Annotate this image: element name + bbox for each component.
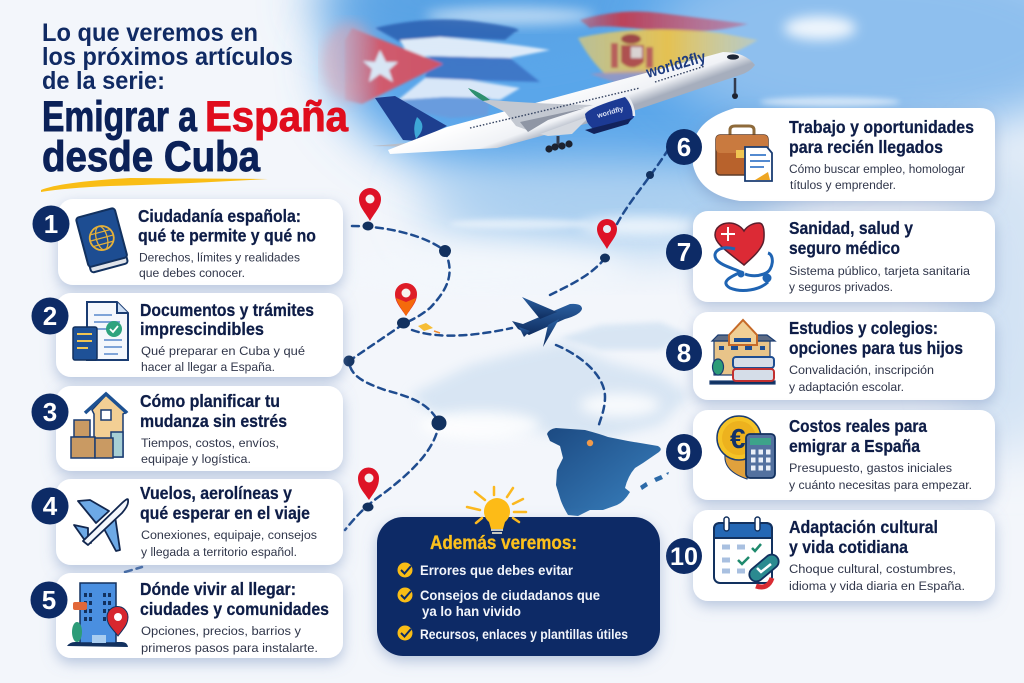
map of Spain <box>547 428 669 516</box>
large airliner <box>372 49 755 154</box>
callout: además veremos: Consejos de ciudadanos que <box>420 588 600 604</box>
card 8: Estudios y colegios: <box>789 318 938 338</box>
title: de la serie: <box>42 67 165 95</box>
card 2: imprescindibles <box>140 319 264 339</box>
card 3: equipaje y logística. <box>141 452 251 466</box>
card 1: que debes conocer. <box>139 266 245 280</box>
map pin 3 orange <box>395 283 417 316</box>
icon: euro coin and calculator: € <box>730 423 746 454</box>
badge 4 <box>32 488 68 524</box>
badge 7: 7 <box>677 237 691 267</box>
title: Lo que veremos en <box>42 19 258 47</box>
card 2: hacer al llegar a España. <box>141 360 275 374</box>
card 1: qué te permite y qué no <box>138 226 316 246</box>
title: Emigrar a <box>42 93 198 141</box>
card 4: y llegada a territorio español. <box>141 545 297 559</box>
icon: building with pin <box>67 583 128 647</box>
card 9 <box>666 410 995 500</box>
card 5 <box>30 573 343 658</box>
card 1 <box>32 199 343 285</box>
badge 7 <box>666 234 702 270</box>
small Caribbean islands <box>418 323 440 333</box>
card 2: Qué preparar en Cuba y qué <box>141 344 305 358</box>
card 6: Cómo buscar empleo, homologar <box>789 162 965 176</box>
card 4: Conexiones, equipaje, consejos <box>141 528 317 542</box>
card 8: opciones para tus hijos <box>789 338 963 358</box>
map pin 4 <box>358 468 379 500</box>
card 9: y cuánto necesitas para empezar. <box>789 478 972 492</box>
large airliner: worldfly <box>596 106 624 120</box>
icon: airplane <box>74 499 128 551</box>
airline logo: world2fly <box>644 49 708 82</box>
card 8 <box>666 312 995 400</box>
map pin 2 <box>597 219 617 249</box>
badge 8: 8 <box>677 338 691 368</box>
route stop dots <box>344 171 654 512</box>
card 9: emigrar a España <box>789 436 920 456</box>
card 6 <box>666 108 995 201</box>
badge 5 <box>30 582 68 618</box>
badge 3 <box>32 394 68 430</box>
icon: school and books <box>710 320 775 384</box>
callout: además veremos <box>377 517 660 656</box>
card 7: y seguros privados. <box>789 280 893 294</box>
icon: passport <box>76 208 129 273</box>
badge 8 <box>666 335 702 371</box>
badge 5: 5 <box>42 585 56 615</box>
check 2 <box>398 588 412 602</box>
title: los próximos artículos <box>42 43 293 71</box>
card 7: Sistema público, tarjeta sanitaria <box>789 264 970 278</box>
callout: además veremos: ya lo han vivido <box>422 604 521 620</box>
card 1: Ciudadanía española: <box>138 206 301 226</box>
card 5: Opciones, precios, barrios y <box>141 624 302 638</box>
badge 1: 1 <box>44 209 58 239</box>
icon: documents <box>73 302 128 360</box>
title: desde Cuba <box>42 133 261 181</box>
small plane silhouette <box>512 297 582 347</box>
badge 2: 2 <box>43 301 57 331</box>
badge 9: 9 <box>677 437 691 467</box>
card 5: primeros pasos para instalarte. <box>141 641 318 655</box>
card 7 <box>666 211 995 302</box>
card 10: idioma y vida diaria en España. <box>789 579 965 593</box>
card 5: ciudades y comunidades <box>140 599 329 619</box>
flag: Cuba <box>322 20 550 118</box>
badge 3: 3 <box>43 397 57 427</box>
icon: light bulb <box>467 487 526 533</box>
card 7: Sanidad, salud y <box>789 218 913 238</box>
dashed route <box>125 150 668 572</box>
callout: además veremos: Además veremos: <box>430 532 577 554</box>
check 3 <box>398 626 412 640</box>
card 10: Adaptación cultural <box>789 517 938 537</box>
icon: house and boxes <box>71 394 127 458</box>
badge 10: 10 <box>670 543 698 571</box>
badge 2 <box>32 298 68 334</box>
flag: Spain <box>578 12 758 84</box>
icon: euro coin and calculator <box>717 416 775 479</box>
card 10: Choque cultural, costumbres, <box>789 562 956 576</box>
card 3: Cómo planificar tu <box>140 391 280 411</box>
card 4 <box>32 479 343 565</box>
map pin 1 <box>359 188 381 221</box>
badge 10 <box>666 538 702 574</box>
check 1 <box>398 562 412 578</box>
card 9: Costos reales para <box>789 416 927 436</box>
card 6: Trabajo y oportunidades <box>789 117 974 137</box>
badge 1 <box>32 206 70 242</box>
badge 6: 6 <box>677 132 691 162</box>
card 3 <box>32 386 343 471</box>
icon: heart and stethoscope <box>715 223 772 290</box>
card 9: Presupuesto, gastos iniciales <box>789 461 952 475</box>
card 5: Dónde vivir al llegar: <box>140 579 296 599</box>
badge 9 <box>666 434 702 470</box>
callout: además veremos: Recursos, enlaces y plantillas útiles <box>420 627 628 643</box>
card 7: seguro médico <box>789 238 900 258</box>
badge 6 <box>666 129 702 165</box>
icon: calendar with check <box>714 517 782 587</box>
card 3: mudanza sin estrés <box>140 411 287 431</box>
title <box>41 19 349 192</box>
card 10: y vida cotidiana <box>789 537 908 557</box>
badge 4: 4 <box>43 491 58 521</box>
card 6: títulos y emprender. <box>790 178 896 192</box>
card 2: Documentos y trámites <box>140 300 314 320</box>
title: España <box>205 93 349 141</box>
card 4: qué esperar en el viaje <box>140 503 310 523</box>
card 10 <box>666 510 995 601</box>
card 3: Tiempos, costos, envíos, <box>141 436 279 450</box>
icon: briefcase and document <box>716 126 772 181</box>
card 2 <box>32 293 343 377</box>
callout: además veremos: Errores que debes evitar <box>420 563 573 579</box>
card 4: Vuelos, aerolíneas y <box>140 483 292 503</box>
card 1: Derechos, límites y realidades <box>139 250 300 264</box>
card 6: para recién llegados <box>789 137 943 157</box>
card 8: Convalidación, inscripción <box>789 363 934 377</box>
card 8: y adaptación escolar. <box>789 380 904 394</box>
